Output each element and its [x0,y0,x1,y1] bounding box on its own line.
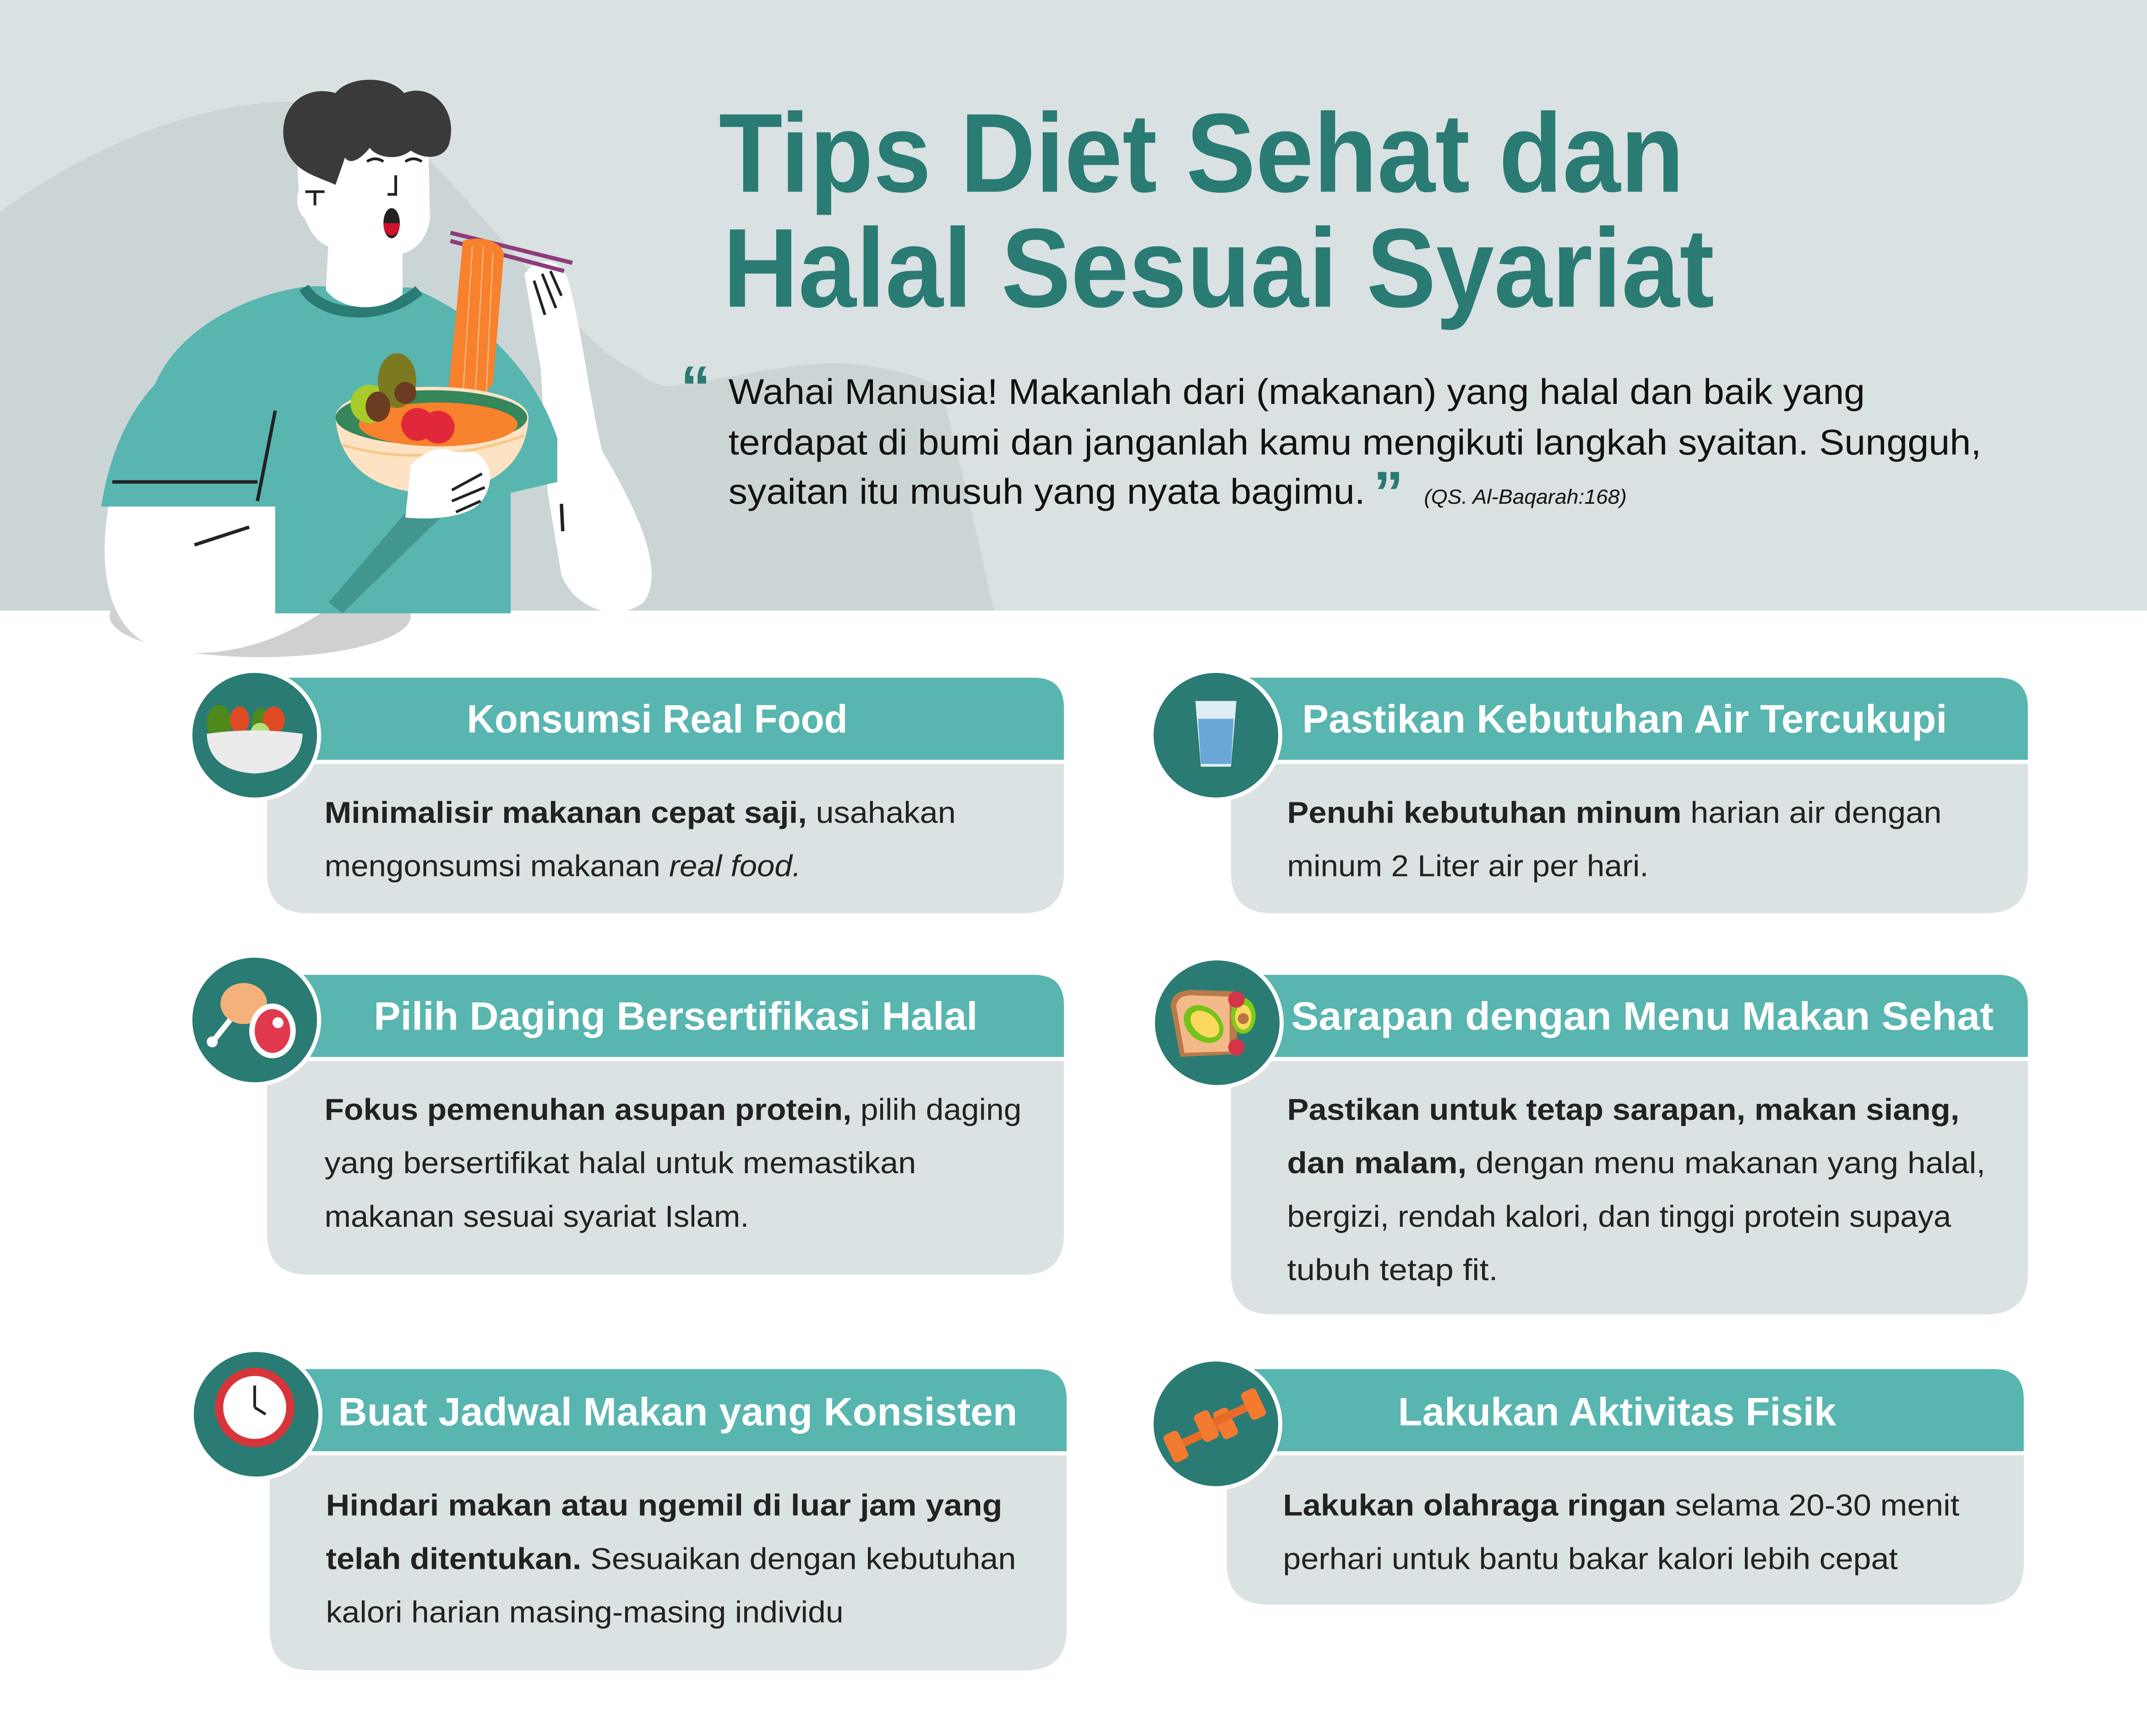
panel: Lakukan Aktivitas Fisik [1151,1360,2024,1605]
panel: Sarapan dengan Menu Makan Sehat: Pastikan untuk tetap sarapan, makan siang, [1287,1093,1959,1126]
panel: Sarapan dengan Menu Makan Sehat: tubuh tetap fit. [1287,1252,1498,1286]
panel: Buat Jadwal Makan yang Konsisten [192,1350,1067,1670]
quote: syaitan itu musuh yang nyata bagimu. [729,472,1365,512]
panel: Buat Jadwal Makan yang Konsisten: Hindari makan atau ngemil di luar jam yang [326,1488,1003,1522]
chopsticks [451,233,572,271]
panel: Lakukan Aktivitas Fisik: Lakukan Aktivitas Fisik [1398,1390,1836,1434]
header band [0,0,2147,610]
quote: ” [1373,459,1404,526]
quote: Wahai Manusia! Makanlah dari (makanan) yang halal dan baik yang [729,372,1865,412]
left arm [104,500,397,653]
panel: Sarapan dengan Menu Makan Sehat: dan malam, dengan menu makanan yang halal, [1287,1146,1985,1180]
panel: Buat Jadwal Makan yang Konsisten: Buat Jadwal Makan yang Konsisten [338,1390,1017,1434]
icon: glass of water [1151,671,1280,800]
icon: meat [191,956,319,1084]
panel: Pilih Daging Bersertifikasi Halal [191,956,1064,1274]
panel: Buat Jadwal Makan yang Konsisten: telah ditentukan. Sesuaikan dengan kebutuhan [326,1541,1016,1575]
quote: terdapat di bumi dan janganlah kamu mengikuti langkah syaitan. Sungguh, [729,423,1981,463]
noodles [447,239,504,411]
title [719,90,1714,331]
panel: Sarapan dengan Menu Makan Sehat: Sarapan dengan Menu Makan Sehat [1291,994,1994,1038]
shirt [101,286,557,613]
icon: dumbbells [1151,1360,1280,1488]
panel: Pastikan Kebutuhan Air Tercukupi: minum 2 Liter air per hari. [1287,849,1649,882]
panel: Lakukan Aktivitas Fisik: perhari untuk bantu bakar kalori lebih cepat [1283,1541,1898,1575]
quote [681,354,1981,526]
neck & face [326,239,403,307]
right arm [524,261,652,612]
title: Tips Diet Sehat dan [719,90,1684,216]
panel: Konsumsi Real Food: Konsumsi Real Food [467,697,848,741]
panel: Pastikan Kebutuhan Air Tercukupi: Pastikan Kebutuhan Air Tercukupi [1302,697,1947,741]
title: Halal Sesuai Syariat [723,205,1714,331]
panel: Pastikan Kebutuhan Air Tercukupi [1151,671,2028,913]
panel: Pilih Daging Bersertifikasi Halal: Pilih Daging Bersertifikasi Halal [374,994,978,1038]
icon: avocado toast [1153,958,1281,1087]
panel: Pilih Daging Bersertifikasi Halal: makanan sesuai syariat Islam. [325,1199,749,1233]
panel: Lakukan Aktivitas Fisik: Lakukan olahraga ringan selama 20-30 menit [1283,1488,1959,1522]
hand on bowl [405,449,490,518]
panel: Pilih Daging Bersertifikasi Halal: Fokus pemenuhan asupan protein, pilih daging [325,1093,1021,1126]
panel: Pilih Daging Bersertifikasi Halal: yang bersertifikat halal untuk memastikan [325,1146,916,1180]
panel: Sarapan dengan Menu Makan Sehat [1153,958,2028,1314]
illustration: man eating noodles [101,80,652,657]
quote: (QS. Al-Baqarah:168) [1424,485,1627,508]
panel: Buat Jadwal Makan yang Konsisten: kalori harian masing-masing individu [326,1595,844,1629]
panel: Konsumsi Real Food: Minimalisir makanan cepat saji, usahakan [325,795,956,829]
bowl [336,387,529,493]
panel: Pastikan Kebutuhan Air Tercukupi: Penuhi kebutuhan minum harian air dengan [1287,795,1941,829]
panel: Konsumsi Real Food [191,671,1064,913]
quote: “ [681,354,711,421]
panel: Sarapan dengan Menu Makan Sehat: bergizi, rendah kalori, dan tinggi protein supaya [1287,1199,1951,1233]
icon: clock [192,1350,321,1479]
icon: salad bowl [191,671,319,800]
panel: Konsumsi Real Food: mengonsumsi makanan real food. [325,849,801,882]
